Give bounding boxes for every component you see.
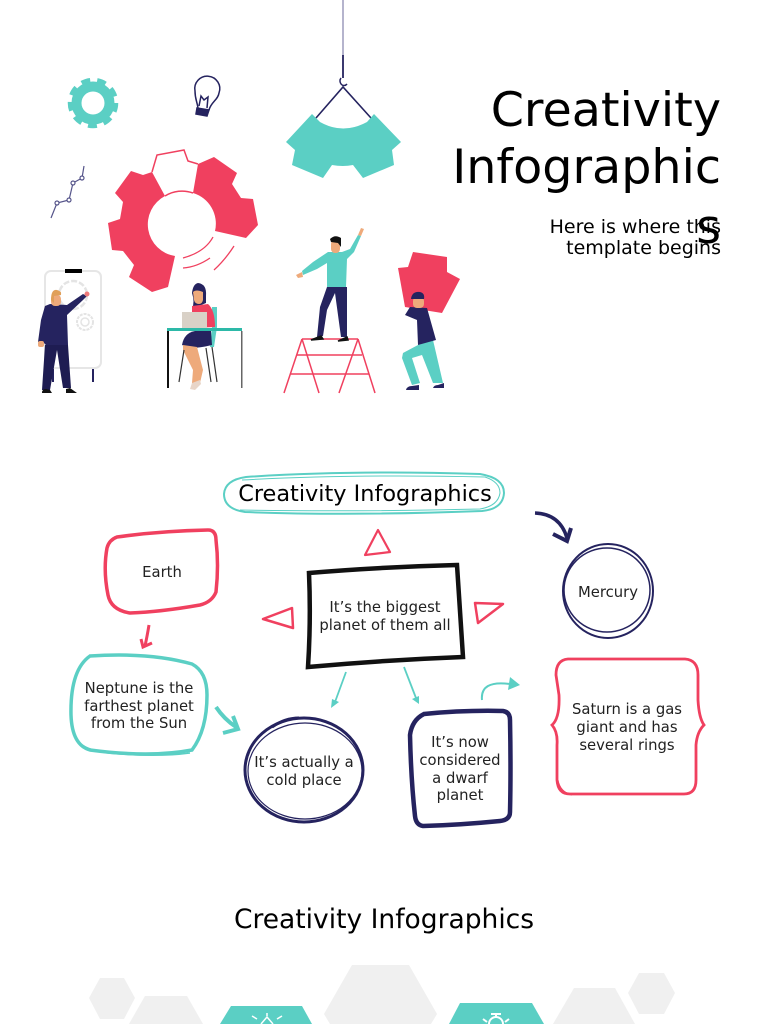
- subtitle: template begins: [566, 237, 721, 259]
- arrow: heading to Mercury: [535, 513, 571, 541]
- icon: white bulb on teal hexagon: [252, 1013, 282, 1024]
- triangle arrow: left: [263, 608, 293, 628]
- triangle arrow: top: [365, 530, 390, 555]
- person: man on ladder: [296, 228, 364, 341]
- node: Saturn: several rings: [579, 737, 675, 754]
- whiteboard: [45, 269, 101, 382]
- node: biggest planet: planet of them all: [319, 617, 451, 634]
- person: woman at desk with laptop: [167, 283, 242, 390]
- ladder: [284, 339, 375, 393]
- node: dwarf planet: a dwarf: [432, 770, 489, 787]
- hexagon row: [89, 965, 675, 1024]
- node: Neptune: from the Sun: [91, 715, 187, 732]
- section title: Creativity Infographics: [234, 904, 534, 935]
- arrow: center to dwarf planet: [404, 667, 419, 704]
- node: Earth: Earth: [142, 564, 182, 581]
- triangle arrow: right: [475, 603, 503, 623]
- title: Creativity: [491, 83, 721, 138]
- subtitle: Here is where this: [550, 216, 721, 238]
- node: Saturn: Saturn is a gas: [572, 701, 682, 718]
- node: cold place: cold place: [266, 772, 342, 789]
- node: Neptune: [71, 655, 207, 755]
- person: man carrying pink gear piece: [398, 252, 460, 390]
- icon: line chart: [51, 166, 84, 218]
- icon: light bulb: [195, 76, 220, 116]
- arrow: Neptune to cold place: [216, 707, 238, 733]
- node: Neptune: farthest planet: [84, 698, 194, 715]
- icon: small teal gear: [70, 80, 116, 126]
- node: biggest planet: [308, 565, 463, 667]
- node: cold place: [245, 718, 363, 822]
- node: dwarf planet: [410, 711, 510, 826]
- node: Mercury: Mercury: [578, 584, 638, 601]
- arrow: dwarf planet to Saturn: [482, 677, 520, 700]
- large pink gear: [108, 150, 258, 292]
- node: Saturn: [552, 659, 704, 795]
- heading pill: Creativity Infographics: [224, 473, 504, 514]
- subtitle: [550, 216, 721, 259]
- title: Infographic: [452, 140, 721, 195]
- node: Saturn: giant and has: [576, 719, 678, 736]
- node: dwarf planet: It’s now: [431, 734, 489, 751]
- crane hook holding teal gear: [286, 0, 401, 178]
- person: man at whiteboard: [38, 290, 90, 393]
- node: Neptune: Neptune is the: [85, 680, 193, 697]
- node: Mercury: [563, 544, 653, 638]
- arrow: center to cold place: [331, 672, 346, 708]
- node: Earth: [105, 530, 218, 613]
- arrow: Earth to Neptune: [141, 625, 152, 647]
- icon: white gear on teal hexagon: [483, 1014, 509, 1024]
- node: biggest planet: It’s the biggest: [329, 599, 441, 616]
- node: dwarf planet: planet: [437, 787, 484, 804]
- title: s: [696, 200, 721, 255]
- heading pill: Creativity Infographics: Creativity Infographics: [238, 481, 492, 507]
- node: dwarf planet: considered: [419, 752, 501, 769]
- node: cold place: It’s actually a: [254, 754, 354, 771]
- title: [452, 83, 721, 255]
